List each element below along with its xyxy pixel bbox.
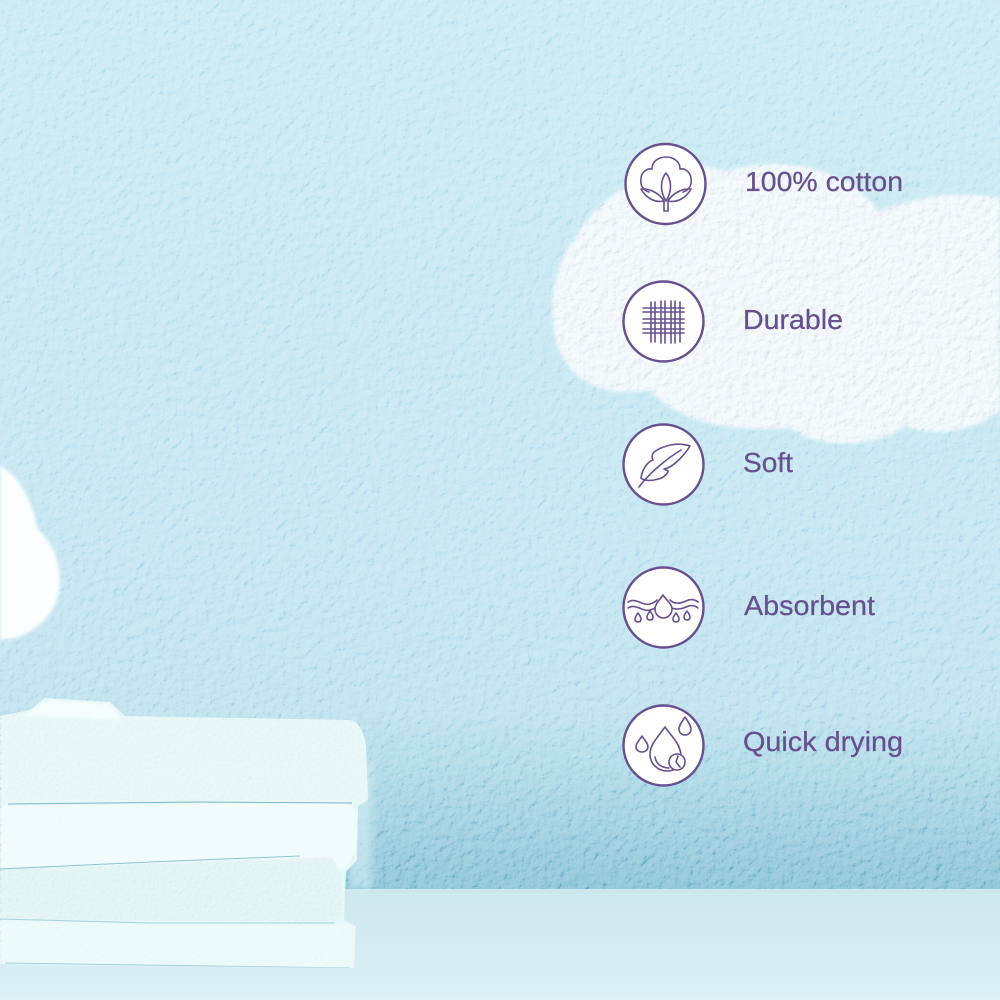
table surface: [0, 889, 1000, 1000]
towel shadow on wall: [350, 760, 372, 889]
cloud: left edge: [0, 466, 60, 640]
cloud: right: [540, 150, 1000, 450]
towel 3: [40, 858, 336, 868]
feature: soft: [624, 424, 793, 504]
icon: woven fabric: [624, 282, 704, 362]
label: durable: Durable: [743, 304, 843, 335]
feature: 100% cotton: [626, 144, 903, 224]
towel top fold highlight: [28, 700, 120, 720]
folded towel stack: [0, 695, 372, 975]
feature: quick drying: [624, 706, 903, 786]
towel 1: [0, 700, 368, 806]
label: absorbent: Absorbent: [744, 590, 875, 621]
towel 2: [0, 802, 358, 868]
feature: absorbent: [624, 568, 875, 648]
icon: cotton boll: [626, 144, 706, 224]
icon: feather: [624, 424, 704, 504]
label: 100% cotton: 100% cotton: [745, 166, 903, 197]
label: soft: Soft: [743, 447, 793, 478]
feature: durable: [624, 282, 843, 362]
icon: water drop layers: [624, 568, 704, 648]
towel 4: [0, 920, 356, 968]
icon: drops and clock: [624, 706, 704, 786]
label: quick drying: Quick drying: [743, 726, 903, 757]
